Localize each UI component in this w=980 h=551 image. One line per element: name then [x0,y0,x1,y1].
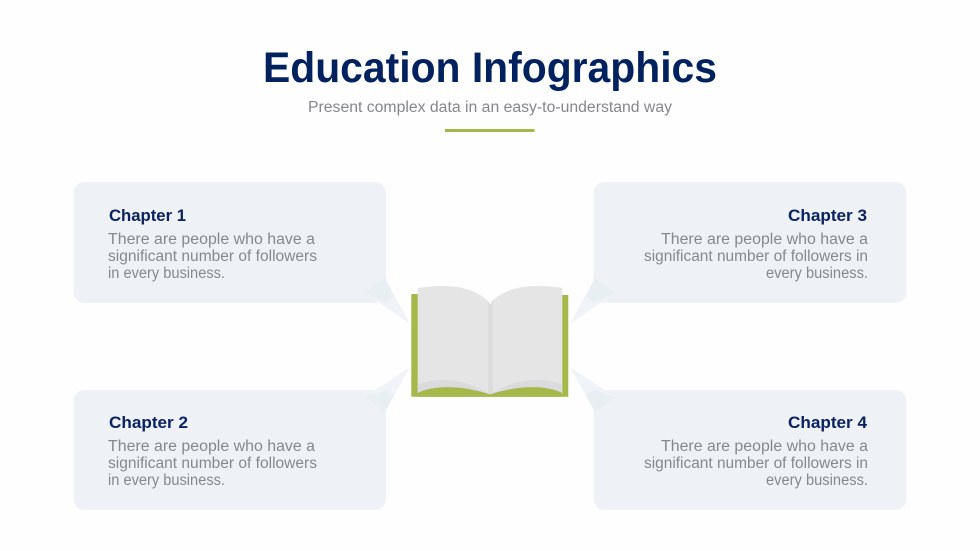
heading: chapter 3: Chapter 3 [788,206,867,225]
body text: chapter 3: There are people who have a [661,231,868,248]
body text: chapter 2: There are people who have a [108,438,315,455]
body text: chapter 4: every business. [766,472,868,489]
heading: chapter 2: Chapter 2 [109,413,188,432]
title: Education Infographics [263,44,717,92]
pointer: chapter 3 [570,278,615,324]
pointer: chapter 2 [365,367,410,412]
body text: chapter 2: in every business. [108,472,225,489]
body text: chapter 2: significant number of followers [108,455,317,472]
panel: chapter 3 [570,182,906,324]
heading: chapter 4: Chapter 4 [788,413,868,432]
body text: chapter 3: significant number of followers in [644,248,868,265]
body text: chapter 3 [644,231,868,282]
title underline [445,129,534,132]
heading: chapter 1: Chapter 1 [109,206,186,225]
body text: chapter 1: significant number of followers [108,248,317,265]
panel: chapter 1 [74,182,410,324]
body text: chapter 4: There are people who have a [661,438,868,455]
body text: chapter 3: every business. [766,265,868,282]
pointer: chapter 1 [365,278,410,324]
panel: chapter 2 [74,367,410,510]
body text: chapter 4: significant number of followers in [644,455,868,472]
pointer: chapter 4 [570,367,615,412]
body text: chapter 2 [108,438,317,489]
body text: chapter 1: in every business. [108,265,225,282]
icon: open book [411,286,568,397]
body text: chapter 1: There are people who have a [108,231,315,248]
panel: chapter 4 [570,367,906,510]
body text: chapter 1 [108,231,317,282]
body text: chapter 4 [644,438,868,489]
subtitle: Present complex data in an easy-to-understand way [308,99,672,116]
